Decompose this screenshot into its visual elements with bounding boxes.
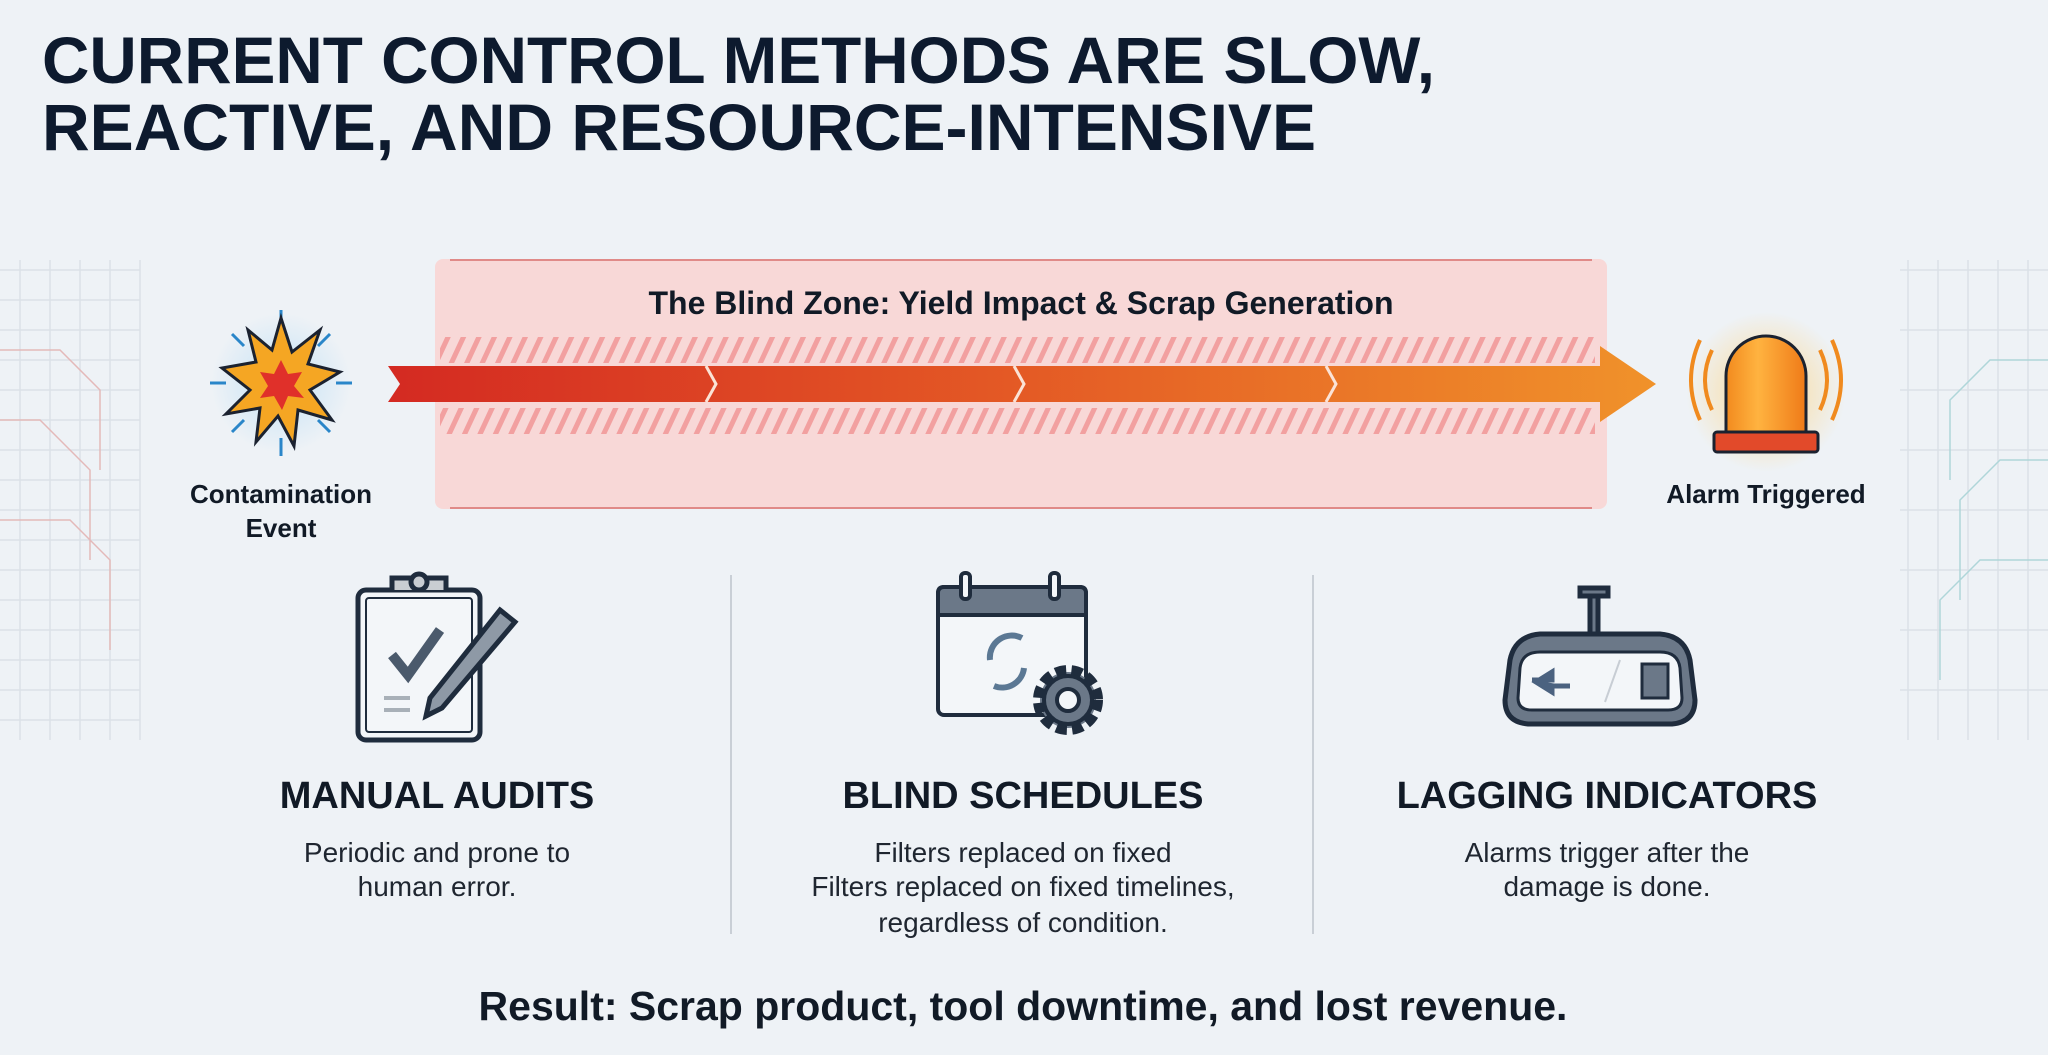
label: contamination event — [190, 479, 372, 543]
icon: contamination starburst — [210, 310, 352, 456]
heading: lagging indicators: LAGGING INDICATORS — [1397, 775, 1817, 817]
decorative circuits left — [0, 260, 2048, 740]
heading: blind schedules: BLIND SCHEDULES — [842, 775, 1204, 817]
text: blind schedules description: Filters replaced on fixed — [874, 837, 1172, 868]
blind zone heading: The Blind Zone: Yield Impact & Scrap Generation — [648, 285, 1394, 321]
result statement: Result: Scrap product, tool downtime, and lost revenue. — [479, 983, 1567, 1029]
icon: alarm — [1686, 312, 1846, 472]
label: alarm triggered: Alarm Triggered — [1666, 479, 1866, 509]
label: contamination event: Event — [246, 513, 317, 543]
text: lagging indicators description — [1465, 837, 1749, 902]
text: blind schedules description: regardless of condition. — [878, 907, 1168, 938]
text: blind schedules description — [811, 837, 1235, 938]
text: lagging indicators description: Alarms trigger after the — [1465, 837, 1749, 868]
icon: rearview mirror — [1505, 588, 1695, 724]
text: manual audits description: Periodic and prone to — [304, 837, 570, 868]
panel: blind zone — [435, 259, 1607, 509]
text: manual audits description — [304, 837, 570, 902]
arrow: timeline — [388, 346, 1656, 422]
column: manual audits — [280, 574, 594, 902]
title — [42, 23, 1435, 164]
title: CURRENT CONTROL METHODS ARE SLOW, — [42, 23, 1435, 97]
column: lagging indicators — [1397, 588, 1817, 902]
heading: manual audits: MANUAL AUDITS — [280, 775, 594, 817]
text: lagging indicators description: damage is done. — [1503, 871, 1711, 902]
icon: clipboard — [358, 574, 515, 740]
icon: calendar with gear — [938, 573, 1096, 728]
text: blind schedules description: Filters replaced on fixed timelines, — [811, 871, 1235, 902]
column: blind schedules — [811, 573, 1235, 938]
text: manual audits description: human error. — [358, 871, 516, 902]
label: contamination event: Contamination — [190, 479, 372, 509]
title: REACTIVE, AND RESOURCE-INTENSIVE — [42, 90, 1316, 164]
dividers — [730, 575, 732, 934]
